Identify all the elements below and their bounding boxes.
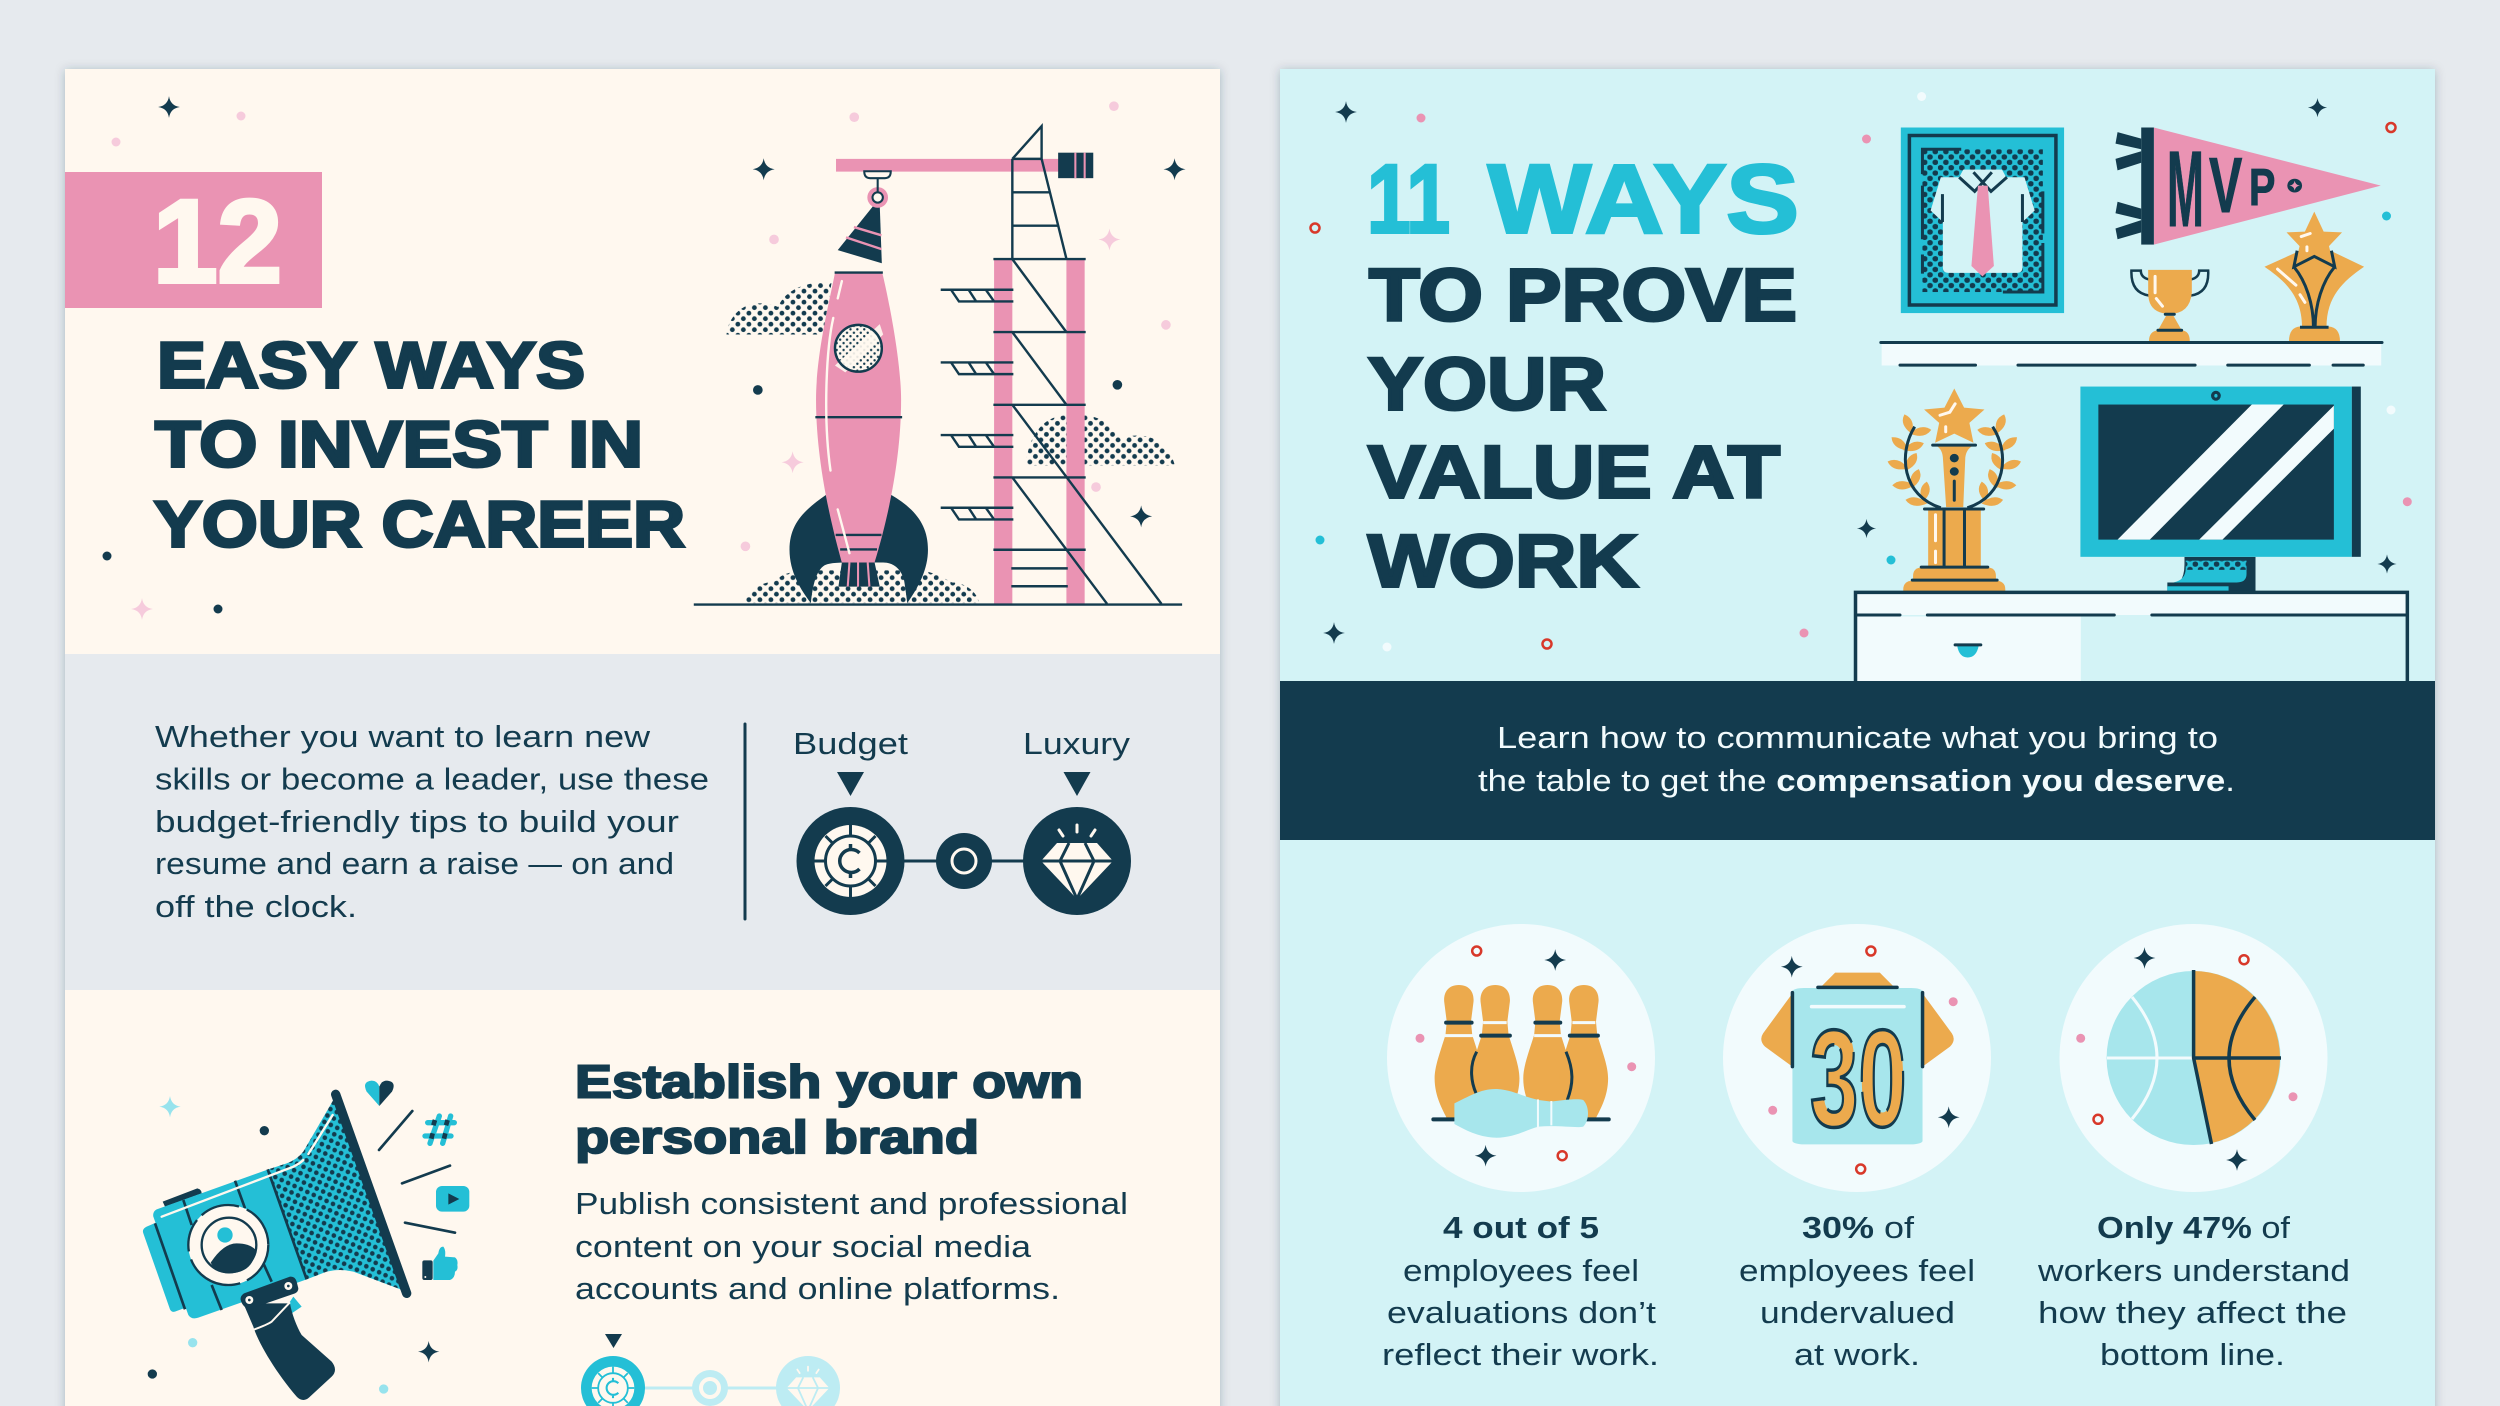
stat text: 4 out of 5: evaluations don’t bbox=[1387, 1295, 1656, 1330]
band: compensation message bbox=[1280, 681, 2435, 840]
stat circle: basketball bbox=[2060, 924, 2328, 1192]
decorative sparkles left header bbox=[102, 96, 246, 620]
budget to luxury scale legend bbox=[793, 726, 1131, 915]
title: easy ways: EASY WAYS bbox=[157, 328, 585, 402]
stat text: only 47 percent: workers understand bbox=[2037, 1253, 2350, 1288]
intro paragraph bbox=[155, 719, 709, 924]
stat text: 4 out of 5: reflect their work. bbox=[1382, 1337, 1659, 1372]
title: 11 ways: 11 bbox=[1367, 144, 1450, 254]
stat circle: jersey: 30 bbox=[1810, 1003, 1907, 1156]
band: compensation message: the table to get the compensation you deserve . bbox=[1478, 763, 2235, 798]
stat text: 30 percent: at work. bbox=[1794, 1337, 1920, 1372]
stat circle: jersey bbox=[1723, 924, 1991, 1192]
heading: establish your brand: Establish your own bbox=[575, 1056, 1083, 1108]
title: 11 ways: TO PROVE bbox=[1369, 254, 1797, 336]
intro paragraph: budget-friendly tips to build your bbox=[155, 804, 679, 839]
pennant lettering bbox=[2167, 129, 2275, 250]
title: 11 ways: WAYS bbox=[1488, 144, 1799, 254]
pennant lettering: M bbox=[2167, 129, 2204, 250]
body: establish your brand: content on your social media bbox=[575, 1229, 1032, 1264]
intro paragraph: resume and earn a raise — on and bbox=[155, 846, 674, 881]
icon: framed shirt bbox=[1901, 127, 2064, 313]
body: establish your brand: Publish consistent and professional bbox=[575, 1186, 1128, 1221]
cabinet bbox=[1856, 592, 2407, 681]
heading: establish your brand: personal brand bbox=[575, 1111, 979, 1163]
icon: gold cup bbox=[2131, 270, 2208, 341]
illustration: megaphone bbox=[143, 1081, 469, 1400]
stat text: only 47 percent: Only 47% of bbox=[2097, 1210, 2290, 1245]
panel: left career card bbox=[65, 69, 1220, 1406]
stat text: 4 out of 5: 4 out of 5 bbox=[1443, 1210, 1599, 1245]
title: easy ways: TO INVEST IN bbox=[155, 408, 643, 480]
icon: laurel trophy bbox=[1886, 388, 2023, 591]
illustration: rocket and scaffold tower bbox=[694, 101, 1186, 605]
title: 11 ways: YOUR bbox=[1368, 342, 1606, 426]
stat text: 30 percent: undervalued bbox=[1760, 1295, 1955, 1330]
stat text: only 47 percent: bottom line. bbox=[2100, 1337, 2285, 1372]
number badge bbox=[65, 172, 322, 308]
stat text: 4 out of 5 bbox=[1382, 1210, 1659, 1372]
heading: establish your brand bbox=[575, 1056, 1083, 1163]
intro paragraph: skills or become a leader, use these bbox=[155, 762, 709, 796]
shelf bbox=[1881, 343, 2382, 366]
intro paragraph: off the clock. bbox=[155, 889, 357, 924]
divider bbox=[744, 724, 746, 919]
stat text: 30 percent: employees feel bbox=[1739, 1253, 1975, 1288]
body: establish your brand bbox=[575, 1186, 1128, 1306]
title: easy ways: YOUR CAREER bbox=[154, 488, 685, 560]
icon: mvp pennant bbox=[2116, 127, 2381, 245]
pennant lettering: P bbox=[2249, 158, 2275, 216]
budget rating scale bbox=[581, 1334, 840, 1406]
number badge: 12 bbox=[153, 176, 282, 308]
budget to luxury scale legend: Budget bbox=[793, 726, 908, 761]
icon: tv monitor bbox=[2080, 387, 2361, 591]
stat circle: bowling pins bbox=[1387, 924, 1655, 1192]
title: 11 ways bbox=[1367, 144, 1799, 602]
stat text: only 47 percent bbox=[2037, 1210, 2350, 1372]
decorative sparkles right header bbox=[1310, 92, 2412, 652]
title: 11 ways: VALUE AT bbox=[1368, 430, 1780, 514]
panel: right value card bbox=[1280, 69, 2435, 1406]
icon: star trophy bbox=[2264, 212, 2364, 341]
illustration: trophy shelf and tv bbox=[1856, 127, 2407, 681]
title: easy ways bbox=[154, 328, 685, 560]
band: compensation message: Learn how to communicate what you bring to bbox=[1497, 720, 2218, 755]
stat text: 30 percent bbox=[1739, 1210, 1975, 1372]
budget to luxury scale legend: Luxury bbox=[1023, 726, 1131, 761]
intro paragraph: Whether you want to learn new bbox=[155, 719, 651, 754]
body: establish your brand: accounts and online platforms. bbox=[575, 1271, 1060, 1306]
stat text: 4 out of 5: employees feel bbox=[1403, 1253, 1639, 1288]
stat text: 30 percent: 30% of bbox=[1802, 1210, 1914, 1245]
panel: budget intro strip bbox=[65, 654, 1220, 990]
pennant lettering: V bbox=[2209, 142, 2243, 229]
stat text: only 47 percent: how they affect the bbox=[2038, 1295, 2347, 1330]
title: 11 ways: WORK bbox=[1368, 520, 1638, 602]
